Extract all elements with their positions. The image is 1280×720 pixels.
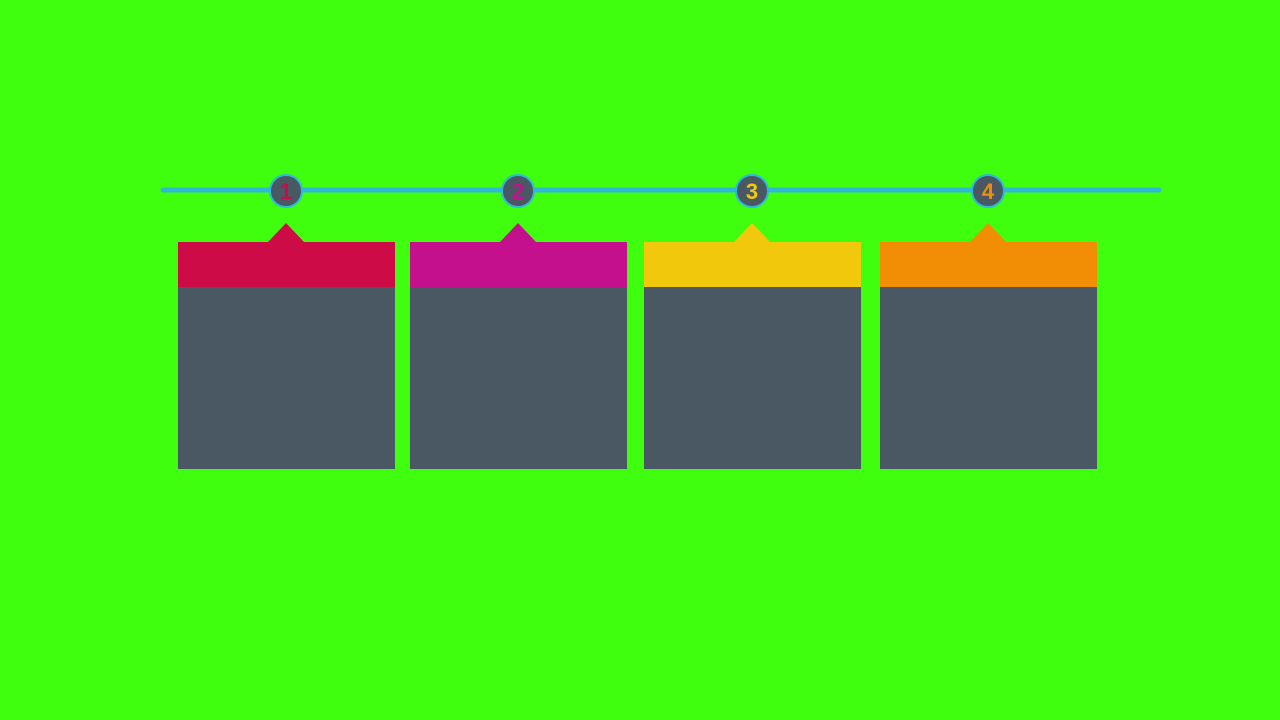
timeline line [163, 188, 1159, 192]
step 3: 3 [746, 179, 758, 204]
step 3 [644, 175, 861, 469]
step 4 [880, 175, 1097, 469]
step 2 [410, 175, 627, 469]
step 1: 1 [280, 179, 292, 204]
step 1 [178, 175, 395, 469]
step 4: 4 [982, 179, 995, 204]
step 2: 2 [512, 179, 524, 204]
